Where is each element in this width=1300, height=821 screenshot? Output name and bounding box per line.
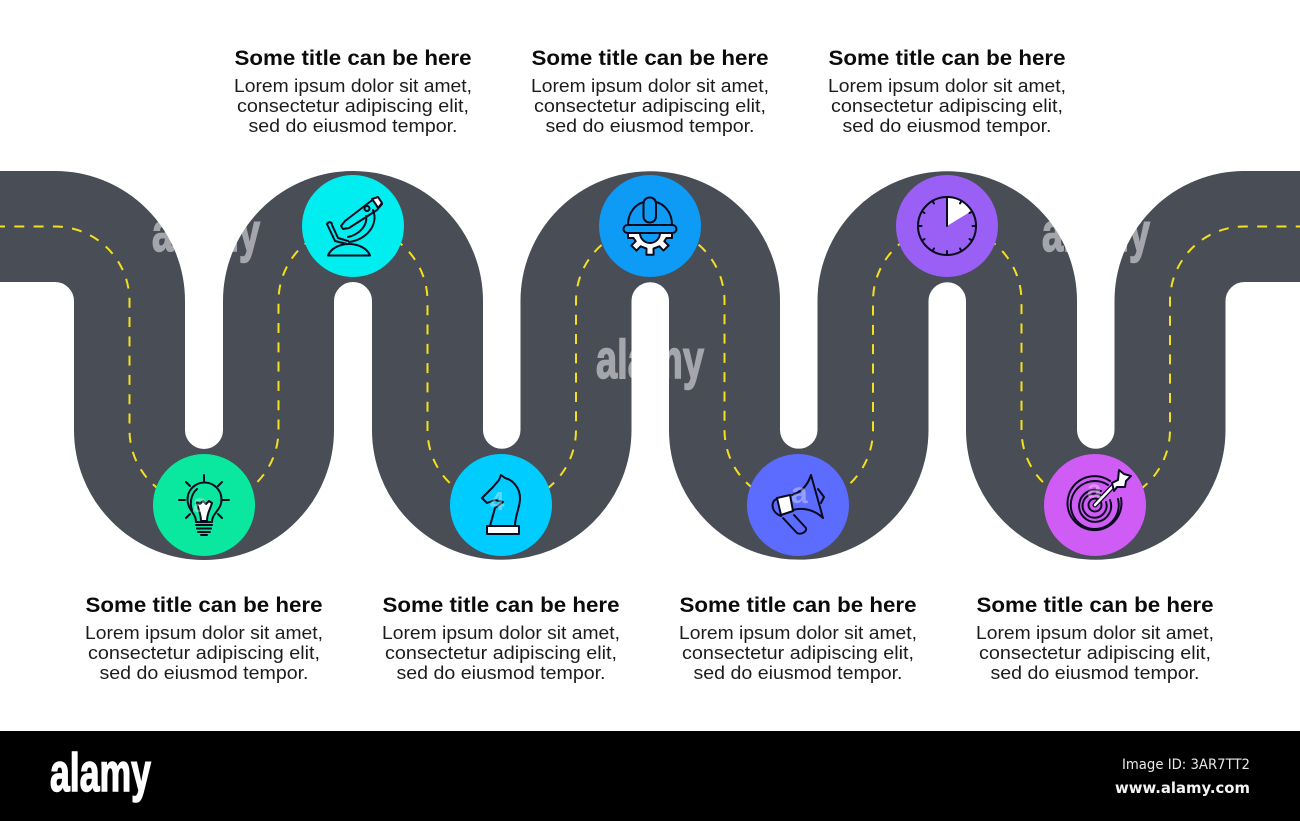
step 7 marker: target <box>1044 454 1146 556</box>
faint watermark letters on icons: 4 <box>490 486 505 516</box>
text block: step 2: Lorem ipsum dolor sit amet, <box>234 76 472 96</box>
text block: step 3 <box>382 594 620 683</box>
footer band <box>0 731 1300 821</box>
text block: step 2 <box>234 47 472 136</box>
icon: chess knight <box>482 475 520 534</box>
step 3 marker: chess knight <box>450 454 552 556</box>
faint watermark letters on icons <box>193 474 1102 518</box>
footer logo: alamy <box>50 743 151 803</box>
watermark: right: alamy <box>1042 201 1150 263</box>
faint watermark letters on icons: a <box>193 488 208 518</box>
text block: step 5: Lorem ipsum dolor sit amet, <box>679 623 917 643</box>
text block: step 7 <box>976 594 1214 683</box>
text block: step 3: sed do eiusmod tempor. <box>396 663 606 683</box>
step 5 marker: megaphone <box>747 454 849 556</box>
text block: step 7: consectetur adipiscing elit, <box>979 643 1211 663</box>
faint watermark letters on icons: a <box>1087 474 1102 504</box>
text block: step 3: Some title can be here <box>382 594 620 617</box>
text block: step 6: Lorem ipsum dolor sit amet, <box>828 76 1066 96</box>
text block: step 4: Lorem ipsum dolor sit amet, <box>531 76 769 96</box>
icon: helmet and gear <box>624 198 676 255</box>
text block: step 1 <box>85 594 323 683</box>
text block: step 6 <box>828 47 1066 136</box>
text block: step 6: Some title can be here <box>828 47 1066 70</box>
step 2 marker: microscope <box>302 175 404 277</box>
text block: step 2: Some title can be here <box>234 47 472 70</box>
image id: Image ID: 3AR7TT2 <box>1122 757 1250 773</box>
step 6 marker: clock <box>896 175 998 277</box>
step 1 marker: light bulb <box>153 454 255 556</box>
icon: microscope <box>327 197 382 256</box>
icon: target with arrow <box>1067 470 1131 530</box>
icon: light bulb <box>179 475 229 535</box>
text block: step 1: consectetur adipiscing elit, <box>88 643 320 663</box>
text block: step 2: consectetur adipiscing elit, <box>237 96 469 116</box>
text block: step 6: consectetur adipiscing elit, <box>831 96 1063 116</box>
text block: step 1: Some title can be here <box>86 594 322 617</box>
text block: step 7: sed do eiusmod tempor. <box>990 663 1200 683</box>
text block: step 4: sed do eiusmod tempor. <box>546 116 754 136</box>
text block: step 4: consectetur adipiscing elit, <box>534 96 766 116</box>
watermark: left: alamy <box>152 201 260 263</box>
text block: step 4 <box>531 47 769 136</box>
text block: step 5: consectetur adipiscing elit, <box>682 643 914 663</box>
text block: step 4: Some title can be here <box>532 47 768 70</box>
website: www.alamy.com <box>1115 779 1250 797</box>
winding road <box>0 226 1300 504</box>
text block: step 5: Some title can be here <box>680 594 916 617</box>
road centre dashed line <box>0 226 1300 504</box>
text block: step 5 <box>679 594 917 683</box>
watermark: centre: alamy <box>596 328 704 390</box>
faint watermark letters on icons: a <box>791 477 808 510</box>
text block: step 2: sed do eiusmod tempor. <box>248 116 458 136</box>
text block: step 5: sed do eiusmod tempor. <box>694 663 902 683</box>
text block: step 1: sed do eiusmod tempor. <box>100 663 308 683</box>
icon: megaphone <box>773 475 824 534</box>
text block: step 7: Lorem ipsum dolor sit amet, <box>976 623 1214 643</box>
text block: step 1: Lorem ipsum dolor sit amet, <box>85 623 323 643</box>
step 4 marker: helmet and gear <box>599 175 701 277</box>
text block: step 6: sed do eiusmod tempor. <box>842 116 1052 136</box>
text block: step 3: consectetur adipiscing elit, <box>385 643 617 663</box>
icon: clock <box>918 197 976 255</box>
text block: step 3: Lorem ipsum dolor sit amet, <box>382 623 620 643</box>
text block: step 7: Some title can be here <box>976 594 1214 617</box>
